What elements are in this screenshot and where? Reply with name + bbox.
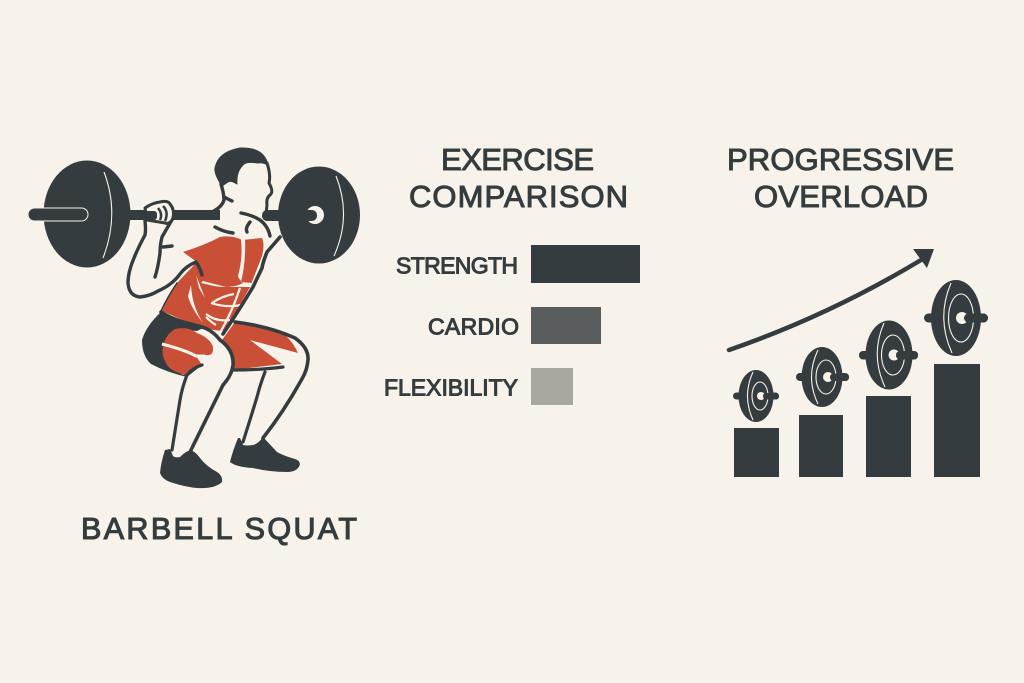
label: flexibility: FLEXIBILITY bbox=[384, 374, 518, 400]
heading: exercise comparison bbox=[409, 142, 628, 214]
bar: cardio bbox=[531, 307, 601, 344]
arrow: upward trend bbox=[729, 249, 934, 350]
icon: weight plate 4 bbox=[924, 280, 988, 356]
heading: progressive overload bbox=[727, 142, 954, 214]
heading: exercise comparison: EXERCISE bbox=[441, 142, 594, 177]
bar: strength bbox=[531, 245, 640, 283]
figure: muscle torso bbox=[162, 236, 264, 331]
bar: flexibility bbox=[531, 368, 573, 405]
panel: barbell squat bbox=[28, 148, 360, 546]
icon: weight plate 1 bbox=[733, 370, 779, 422]
panel: progressive overload bbox=[727, 142, 988, 477]
icon: barbell bbox=[28, 160, 360, 268]
figure: body outline bbox=[128, 148, 308, 450]
muscle highlights bbox=[188, 239, 252, 323]
icon: weight plate 3 bbox=[859, 320, 918, 390]
panel: exercise comparison bbox=[384, 142, 640, 405]
label: cardio: CARDIO bbox=[428, 314, 519, 340]
heading: progressive overload: OVERLOAD bbox=[754, 179, 928, 214]
icon: left shoe bbox=[160, 449, 222, 488]
icon: hand bbox=[130, 201, 174, 223]
icon: weight plate 2 bbox=[796, 347, 849, 407]
bar chart: load steps bbox=[734, 364, 980, 477]
figure: shorts bbox=[142, 312, 298, 377]
heading: barbell squat: BARBELL SQUAT bbox=[81, 512, 357, 546]
label: strength: STRENGTH bbox=[396, 252, 518, 278]
heading: progressive overload: PROGRESSIVE bbox=[727, 142, 954, 177]
heading: exercise comparison: COMPARISON bbox=[409, 179, 628, 214]
icon: right shoe bbox=[230, 437, 300, 472]
